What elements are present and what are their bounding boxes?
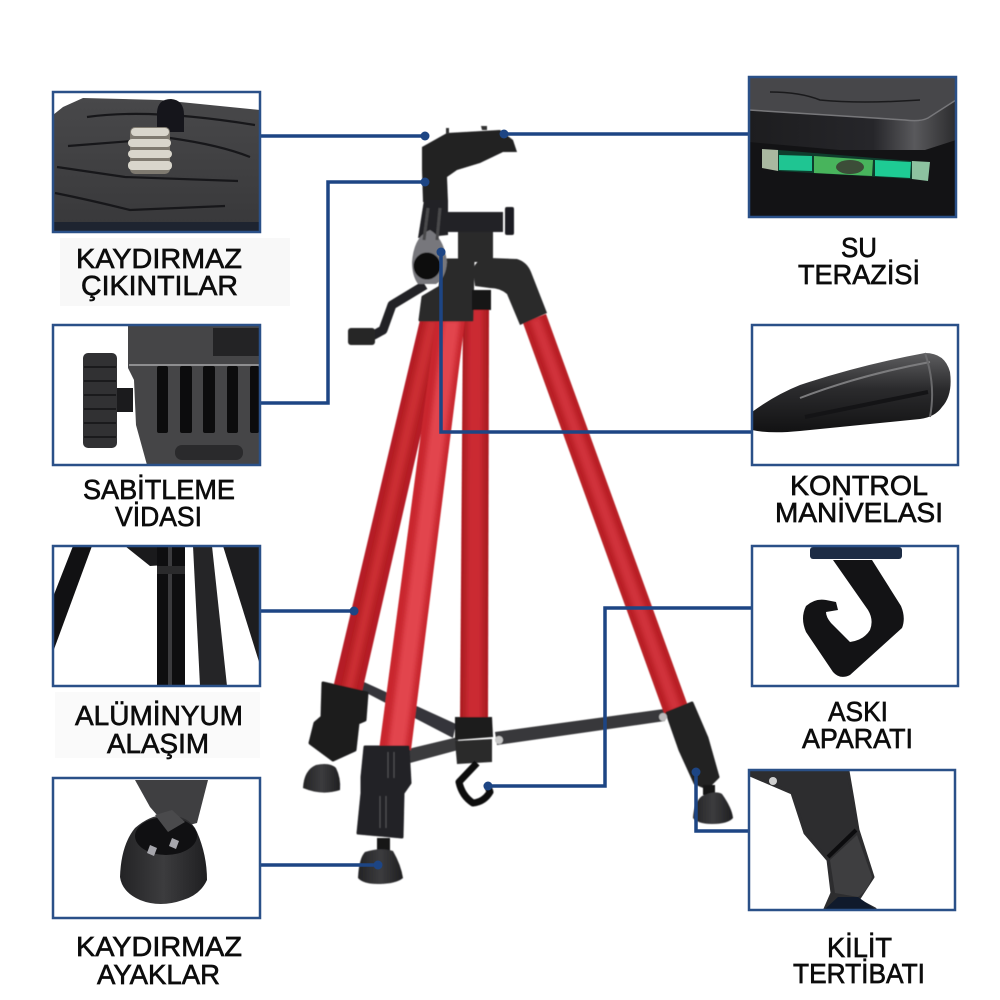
central tripod product image xyxy=(303,126,733,884)
hanging hook xyxy=(459,763,490,803)
icon: ridged thumb screw xyxy=(83,353,133,448)
panel frame: control lever xyxy=(752,325,958,465)
panel frame: hanging hook xyxy=(752,546,958,686)
panel: hanging hook xyxy=(803,547,904,677)
heading: Su Terazisi xyxy=(798,232,920,290)
control handle and crank xyxy=(348,208,447,345)
panel frame: spirit level xyxy=(749,77,956,217)
heading: Kontrol Manivelası: KONTROL xyxy=(790,470,928,501)
leg clamps and feet xyxy=(303,683,733,884)
panel frame: anti-slip plate xyxy=(53,92,260,232)
icon: green bubble level xyxy=(762,149,930,181)
label background xyxy=(60,238,290,306)
icon: silver screw thread xyxy=(128,127,172,174)
panel: control lever xyxy=(753,352,951,432)
panel frame: anti-slip feet xyxy=(53,778,260,918)
panel frame: locking mechanism xyxy=(749,770,955,910)
heading: Kaydırmaz Çıkıntılar xyxy=(76,243,242,301)
heading: Alüminyum Alaşım: ALAŞIM xyxy=(107,728,209,759)
heading: Sabitleme Vidası xyxy=(83,474,235,532)
heading: Kaydırmaz Ayaklar xyxy=(76,931,242,990)
heading: Kilit Tertibatı: TERTİBATI xyxy=(793,958,925,989)
icon: black stud xyxy=(157,99,184,132)
heading: Su Terazisi: SU xyxy=(841,232,877,263)
heading: Kilit Tertibatı xyxy=(793,932,925,989)
heading: Su Terazisi: TERAZİSİ xyxy=(798,259,920,290)
panel frame: aluminium alloy legs xyxy=(53,546,260,686)
label background xyxy=(55,692,260,758)
heading: Alüminyum Alaşım: ALÜMİNYUM xyxy=(75,700,243,731)
heading: Askı Aparatı xyxy=(802,696,913,754)
heading: Askı Aparatı: ASKI xyxy=(828,696,888,727)
heading: Kaydırmaz Çıkıntılar: KAYDIRMAZ xyxy=(76,243,242,274)
heading: Kaydırmaz Ayaklar: KAYDIRMAZ xyxy=(76,931,242,962)
heading: Kaydırmaz Çıkıntılar: ÇIKINTILAR xyxy=(81,270,238,301)
heading: Kaydırmaz Ayaklar: AYAKLAR xyxy=(97,959,220,990)
panel frame: fixing screw xyxy=(53,325,260,465)
heading: Alüminyum Alaşım xyxy=(75,700,243,759)
panel: anti-slip plate xyxy=(53,92,260,232)
tripod head and hub xyxy=(418,126,547,325)
panel: locking mechanism xyxy=(750,771,876,909)
panel: fixing screw xyxy=(83,326,259,464)
heading: Sabitleme Vidası: VİDASI xyxy=(115,501,202,532)
connector lines with dots xyxy=(260,130,752,870)
heading: Kilit Tertibatı: KİLİT xyxy=(827,932,892,963)
heading: Sabitleme Vidası: SABİTLEME xyxy=(83,474,235,505)
panel: spirit level xyxy=(749,77,956,217)
heading: Kontrol Manivelası: MANİVELASI xyxy=(775,497,943,528)
panel: anti-slip feet xyxy=(120,780,208,904)
panel: aluminium alloy legs xyxy=(53,546,260,686)
tripod legs xyxy=(333,308,688,763)
heading: Askı Aparatı: APARATI xyxy=(802,723,913,754)
heading: Kontrol Manivelası xyxy=(775,470,943,528)
